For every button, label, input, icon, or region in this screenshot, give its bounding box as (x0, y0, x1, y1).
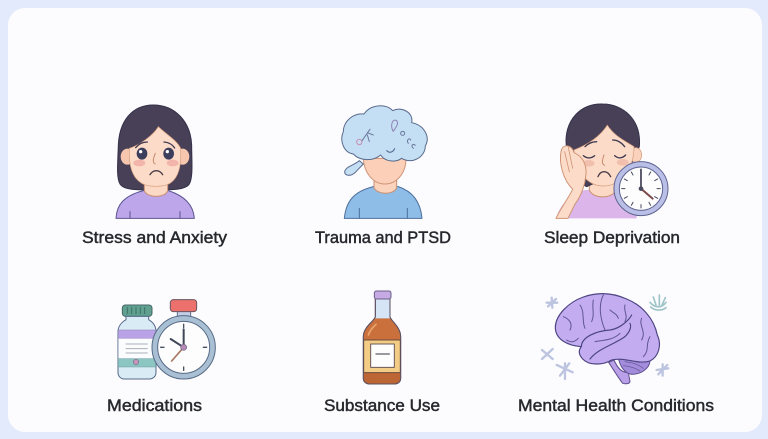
label: Substance Use (324, 397, 440, 415)
icon: head in a cloud (342, 106, 427, 218)
item: sleep deprivation (544, 104, 680, 247)
icon: worried woman (116, 105, 194, 218)
item: substance use (324, 291, 440, 415)
item: medications (107, 300, 215, 415)
label: Sleep Deprivation (544, 229, 680, 247)
label: Trauma and PTSD (315, 229, 451, 247)
item: trauma and ptsd (315, 106, 451, 247)
label: Medications (107, 397, 202, 415)
icon: brown bottle (363, 291, 401, 384)
item: stress and anxiety (82, 105, 228, 247)
label: Mental Health Conditions (518, 397, 714, 415)
item: mental health conditions (518, 294, 714, 415)
icon: brain with sparks (542, 294, 668, 384)
icon: pill bottle and stopwatch (118, 300, 215, 379)
label: Stress and Anxiety (82, 229, 228, 247)
icon: tired person with clock (556, 104, 668, 218)
